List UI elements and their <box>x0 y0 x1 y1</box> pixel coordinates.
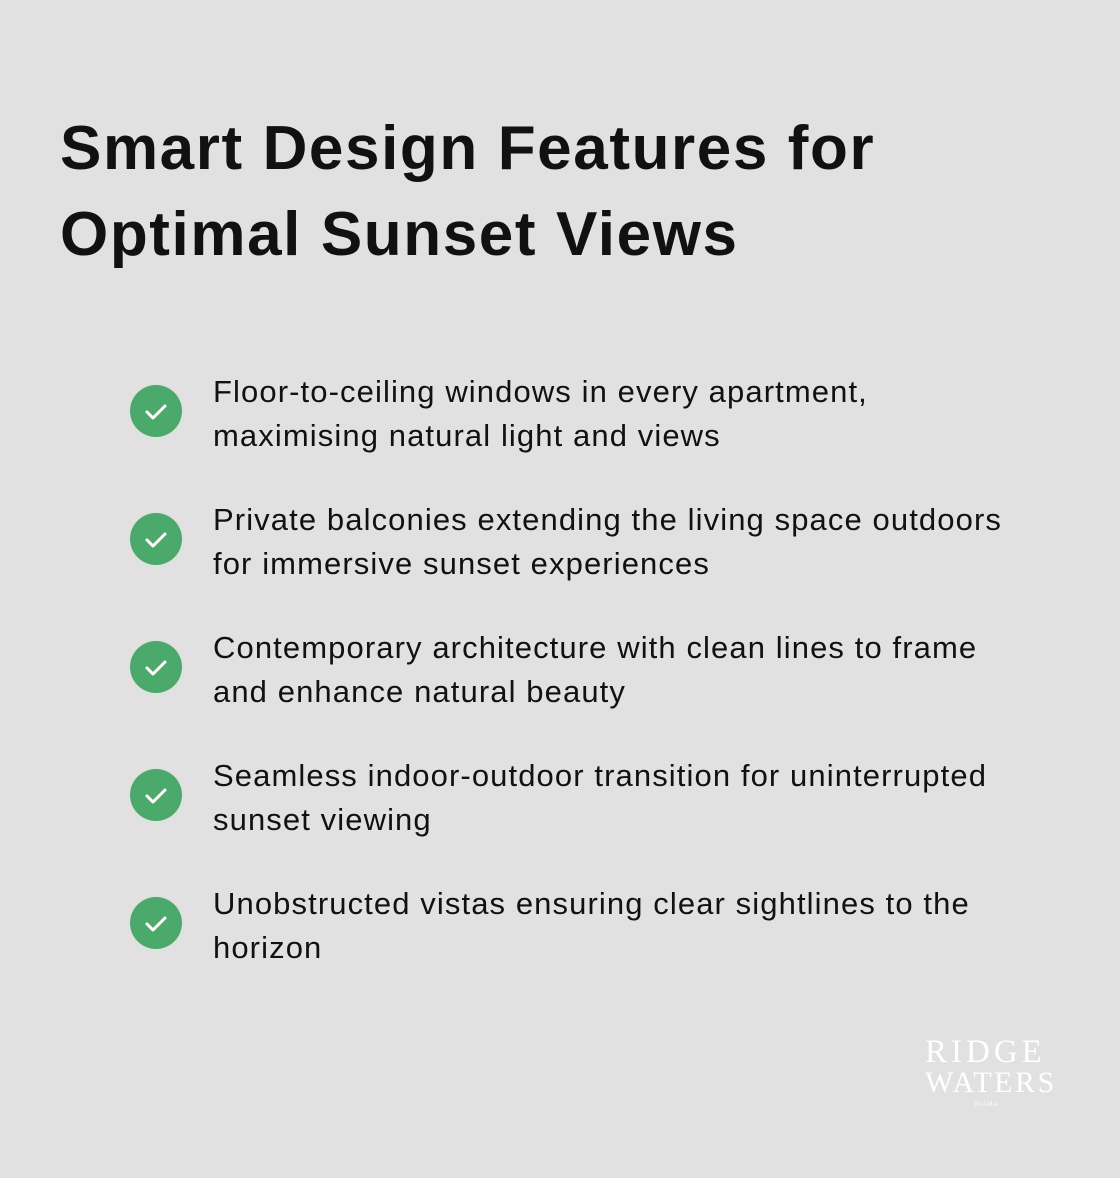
icon: check <box>130 641 182 693</box>
title: Smart Design Features for <box>60 114 875 183</box>
icon: check <box>130 385 182 437</box>
text <box>213 886 970 965</box>
text: Contemporary architecture with clean lines to frame <box>213 630 977 665</box>
text <box>213 374 868 453</box>
item 5 <box>130 886 970 965</box>
text: Seamless indoor-outdoor transition for uninterrupted <box>213 758 987 793</box>
item 4 <box>130 758 987 837</box>
item 2 <box>130 502 1002 581</box>
text: horizon <box>213 930 322 965</box>
icon: check <box>130 897 182 949</box>
text: maximising natural light and views <box>213 418 721 453</box>
text <box>213 758 987 837</box>
logo: RIDGE <box>925 1034 1046 1070</box>
title <box>60 114 875 269</box>
logo: WATERS <box>925 1066 1057 1099</box>
text: for immersive sunset experiences <box>213 546 710 581</box>
text: Unobstructed vistas ensuring clear sightlines to the <box>213 886 970 921</box>
text <box>213 502 1002 581</box>
icon: check <box>130 513 182 565</box>
text: sunset viewing <box>213 802 432 837</box>
item 1 <box>130 374 868 453</box>
text <box>213 630 977 709</box>
icon: check <box>130 769 182 821</box>
logo: KIAMA <box>975 1102 999 1108</box>
logo <box>925 1034 1057 1108</box>
item 3 <box>130 630 977 709</box>
title: Optimal Sunset Views <box>60 200 739 269</box>
text: Private balconies extending the living space outdoors <box>213 502 1002 537</box>
text: Floor-to-ceiling windows in every apartment, <box>213 374 868 409</box>
text: and enhance natural beauty <box>213 674 626 709</box>
